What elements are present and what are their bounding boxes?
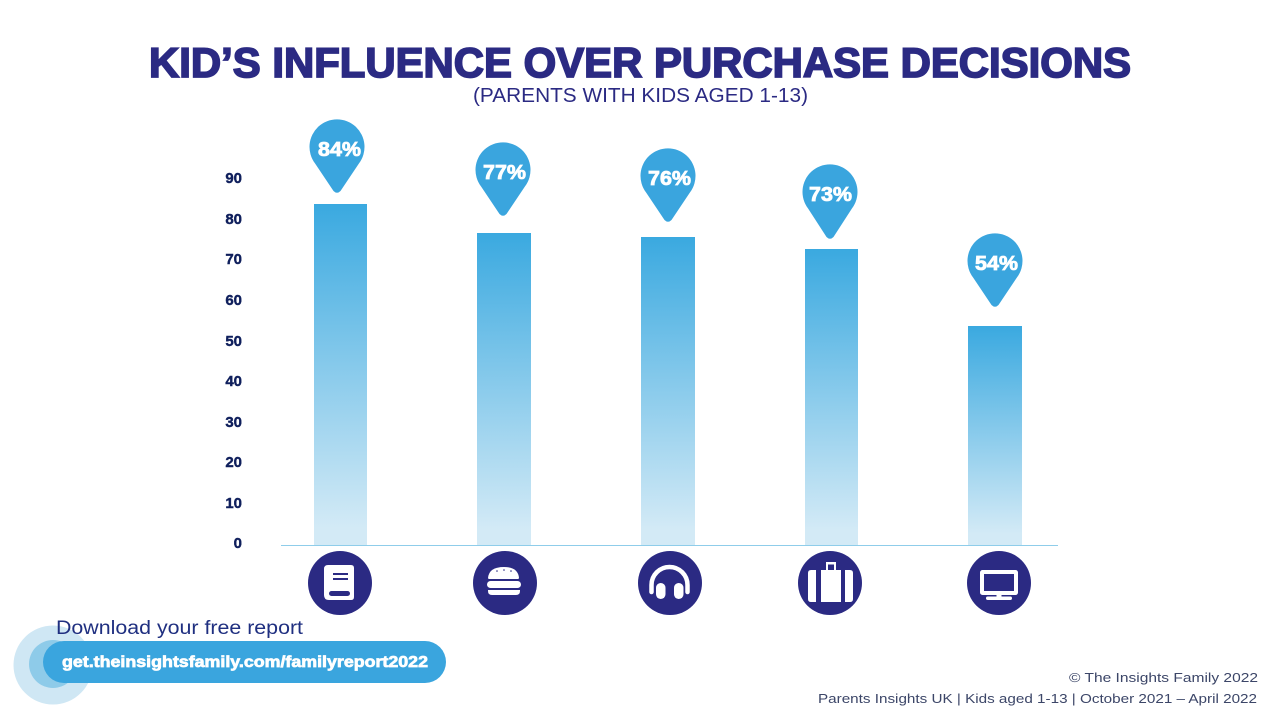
bar: 73% [805,249,858,545]
y axis labels: 90 [225,170,242,187]
y axis labels: 30 [225,414,242,431]
icon: suitcase [798,551,862,615]
download label: Download your free report [56,618,304,639]
title: KID’S INFLUENCE OVER PURCHASE DECISIONS [149,39,1131,86]
pin: 84%: 84% [318,139,361,161]
y axis labels: 10 [225,495,242,512]
pin: 77%: 77% [483,162,526,184]
bar: 84% [314,204,367,545]
y axis labels: 70 [225,251,242,268]
bar: 77% [477,233,531,545]
pin: 77% [476,142,530,216]
download link pill [14,626,446,704]
y axis labels: 50 [225,333,242,350]
bar: 76% [641,237,695,545]
pin: 84% [310,119,364,193]
footer source: Parents Insights UK | Kids aged 1-13 | October 2021 – April 2022 [818,691,1257,706]
pin: 73% [802,164,858,239]
pin: 76%: 76% [648,168,691,190]
y axis labels: 0 [234,535,242,552]
y axis labels: 20 [225,454,242,471]
y axis labels: 40 [225,373,242,390]
pin: 54%: 54% [975,253,1018,275]
footer copyright: © The Insights Family 2022 [1069,670,1258,685]
pin: 73%: 73% [809,184,852,206]
icon: headphones [638,551,702,615]
icon: book [308,551,372,615]
subtitle: (PARENTS WITH KIDS AGED 1-13) [473,85,808,107]
baseline [281,545,1058,546]
y axis labels: 60 [225,292,242,309]
y axis labels [225,170,242,552]
icon: monitor [967,551,1031,615]
y axis labels: 80 [225,211,242,228]
icon: burger [473,551,537,615]
pin: 76% [640,148,696,222]
download link pill: get.theinsightsfamily.com/familyreport2022 [62,654,428,671]
bar chart [281,204,1058,546]
bar: 54% [968,326,1022,545]
pin: 54% [968,233,1022,307]
